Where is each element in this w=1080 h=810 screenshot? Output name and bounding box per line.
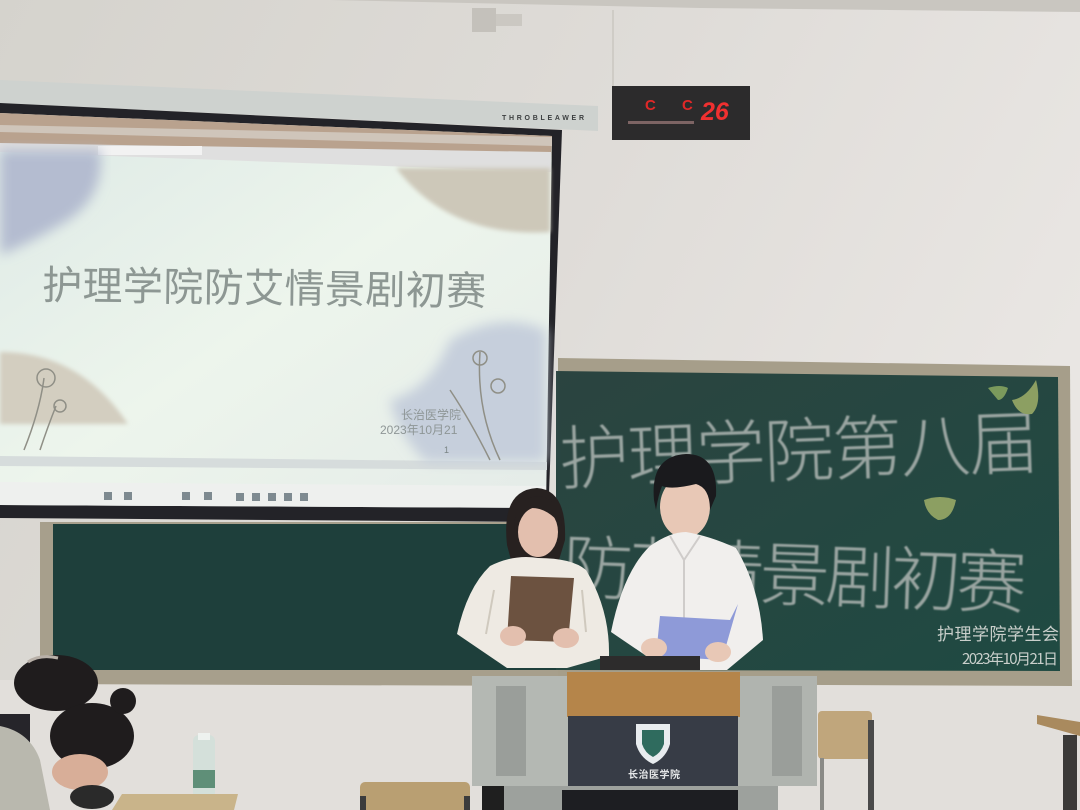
chalkboard heading xyxy=(557,387,1040,629)
slide decoration: top-right wash xyxy=(396,168,550,232)
digital clock: 26 xyxy=(700,98,730,126)
digital clock: C xyxy=(645,97,656,114)
slide decoration: bottom-left mound xyxy=(0,352,128,424)
chalkboard signature: 护理学院学生会 xyxy=(937,620,1059,645)
projector screen housing: THROBLEAWER xyxy=(502,115,584,122)
slide decoration: bottom-right wash xyxy=(390,322,546,462)
taskbar xyxy=(0,482,546,508)
slide decoration: top-left wash xyxy=(0,150,101,255)
chalkboard signature xyxy=(937,620,1059,669)
digital clock xyxy=(612,86,750,140)
water bottle xyxy=(193,733,215,810)
slide title: 护理学院防艾情景剧初赛 xyxy=(42,264,486,314)
lower chalkboard xyxy=(40,522,560,686)
blue papers xyxy=(656,604,738,660)
projection screen xyxy=(0,103,562,522)
chalkboard heading: 防艾情景剧初赛 xyxy=(561,512,1029,629)
chairs and side desk xyxy=(360,711,1080,810)
desk xyxy=(112,794,238,810)
slide subtitle: 长治医学院 xyxy=(401,407,461,422)
male presenter xyxy=(611,454,763,670)
browser toolbar xyxy=(0,113,552,160)
chalkboard heading: 护理学院第八届 xyxy=(557,387,1040,505)
document folder xyxy=(507,576,574,642)
ginkgo leaves xyxy=(924,380,1038,520)
projector screen housing xyxy=(0,80,598,131)
podium school name: 长治医学院 xyxy=(628,768,680,781)
podium xyxy=(472,656,817,810)
podium school crest xyxy=(636,724,670,764)
digital clock: C xyxy=(682,97,693,114)
audience xyxy=(0,655,238,810)
right chalkboard xyxy=(556,358,1072,686)
chalkboard signature: 2023年10月21日 xyxy=(962,648,1058,669)
slide subtitle: 2023年10月21 xyxy=(380,423,458,437)
slide subtitle xyxy=(380,407,461,455)
slide subtitle: 1 xyxy=(444,445,449,455)
slide decoration: plant stems xyxy=(24,351,505,460)
female presenter xyxy=(457,488,609,668)
